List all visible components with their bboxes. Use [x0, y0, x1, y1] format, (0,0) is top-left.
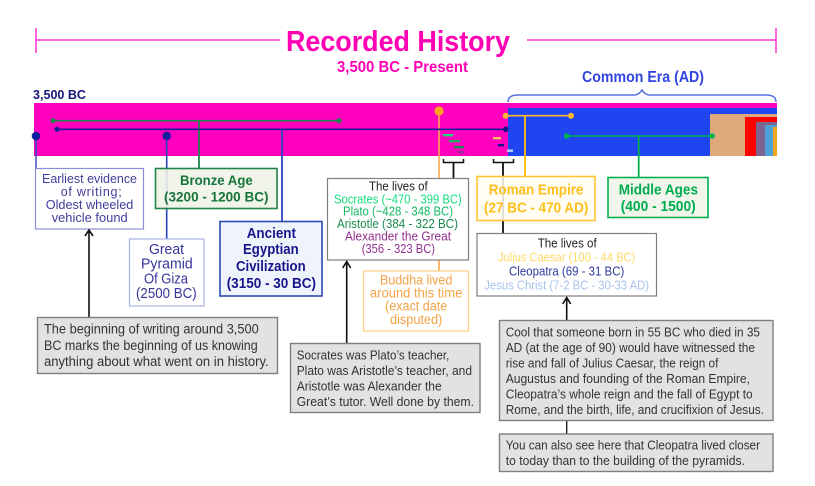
note: born in 55 BC: rise and fall of Julius Caesar, the reign of [506, 355, 719, 370]
connector between grey notes [566, 421, 568, 434]
bronze age span [50, 118, 342, 123]
box: roman empire [477, 176, 595, 220]
note: cleopatra closer to today: to today than to the building of the pyramids. [506, 453, 745, 468]
box: roman empire: (27 BC - 470 AD) [484, 200, 588, 217]
timeline bar [34, 103, 777, 156]
box: earliest writing [36, 168, 144, 229]
box: middle ages [608, 178, 708, 218]
note: teachers [290, 344, 480, 412]
box: ancient egyptian civilization [220, 222, 322, 296]
caesar cleopatra jesus lifespans [493, 137, 513, 152]
box: middle ages: Middle Ages [619, 183, 698, 199]
box: lives of socrates plato aristotle alexander [328, 178, 468, 260]
box: lives of socrates plato aristotle alexander: The lives of [369, 180, 428, 194]
box: ancient egyptian civilization: Egyptian [243, 242, 299, 258]
box: great pyramid: Great [149, 242, 184, 258]
note: born in 55 BC [500, 320, 773, 420]
box: lives of caesar cleopatra jesus [477, 234, 656, 296]
box: buddha: disputed) [390, 312, 442, 327]
arrow: teachers note to lives box [343, 262, 351, 343]
box: bronze age [156, 168, 277, 208]
box: lives of socrates plato aristotle alexander: Aristotle (384 - 322 BC) [337, 217, 458, 231]
common era label: Common Era (AD) [582, 69, 704, 86]
box: buddha: (exact date [385, 298, 447, 313]
box: earliest writing: Oldest wheeled [46, 197, 133, 212]
box: lives of caesar cleopatra jesus: Jesus Christ (7-2 BC - 30-33 AD) [484, 278, 649, 292]
box: lives of caesar cleopatra jesus: The lives of [538, 236, 597, 250]
box: earliest writing: of writing; [61, 185, 122, 199]
box: buddha [364, 271, 468, 331]
note: beginning of writing: anything about what went on in history. [44, 354, 269, 369]
note: teachers: Aristotle was Alexander the [297, 378, 442, 393]
note: born in 55 BC: Augustus and founding of the Roman Empire, [506, 371, 750, 386]
box: great pyramid: (2500 BC) [136, 286, 197, 302]
box: bronze age: (3200 - 1200 BC) [164, 188, 268, 204]
start label: 3,500 BC [33, 88, 86, 102]
egyptian civilization span [54, 126, 509, 132]
marker: earliest writing [32, 132, 40, 140]
title range bracket [36, 28, 776, 53]
philosopher lifespans [443, 134, 464, 153]
note: beginning of writing [38, 318, 278, 374]
box: buddha: Buddha lived [380, 272, 452, 287]
box: ancient egyptian civilization: Civilization [236, 259, 306, 275]
connector lines [36, 111, 639, 271]
box: great pyramid: Of Giza [144, 272, 189, 288]
box: lives of socrates plato aristotle alexander: Alexander the Great [345, 230, 451, 244]
box: lives of socrates plato aristotle alexander: Plato (~428 - 348 BC) [343, 205, 453, 219]
middle ages span [564, 133, 715, 139]
box: ancient egyptian civilization: Ancient [247, 226, 296, 242]
note: born in 55 BC: Rome, and the birth, life, and crucifixion of Jesus. [506, 402, 764, 417]
box: lives of caesar cleopatra jesus: Cleopatra (69 - 31 BC) [509, 264, 624, 278]
roman empire span [503, 113, 574, 119]
note: cleopatra closer to today [500, 434, 773, 472]
note: beginning of writing: BC marks the beginning of us knowing [44, 338, 258, 353]
arrow: writing note to earliest evidence [85, 230, 93, 317]
box: earliest writing: Earliest evidence [42, 171, 137, 186]
box: lives of socrates plato aristotle alexander: (356 - 323 BC) [362, 242, 435, 256]
box: lives of socrates plato aristotle alexander: Socrates (~470 - 399 BC) [334, 192, 462, 206]
note: beginning of writing: The beginning of writing around 3,500 [44, 321, 259, 336]
note: cleopatra closer to today: You can also see here that Cleopatra lived closer [506, 438, 761, 453]
box: great pyramid [130, 239, 204, 306]
box: buddha: around this time [370, 286, 462, 301]
marker: buddha [434, 106, 444, 116]
box: earliest writing: vehicle found [52, 210, 128, 225]
title: Recorded History [286, 26, 510, 58]
note: teachers: Socrates was Plato’s teacher, [297, 347, 449, 362]
box: roman empire: Roman Empire [489, 182, 583, 199]
note: teachers: Plato was Aristotle’s teacher, and [297, 363, 472, 378]
note: born in 55 BC: Cool that someone born in 55 BC who died in 35 [506, 325, 760, 340]
arrow: cool note to lives box [563, 298, 571, 320]
box: ancient egyptian civilization: (3150 - 30 BC) [227, 276, 316, 292]
subtitle: 3,500 BC - Present [337, 59, 468, 76]
marker: great pyramid [162, 132, 171, 140]
box: middle ages: (400 - 1500) [621, 199, 696, 215]
box: lives of caesar cleopatra jesus: Julius Caesar (100 - 44 BC) [498, 251, 635, 265]
common era brace [508, 90, 776, 102]
note: born in 55 BC: Cleopatra’s whole reign and the fall of Egypt to [506, 386, 753, 401]
box: bronze age: Bronze Age [180, 172, 253, 188]
note: born in 55 BC: AD (at the age of 90) would have witnessed the [506, 340, 755, 355]
box: great pyramid: Pyramid [141, 257, 193, 273]
note: teachers: Great’s tutor. Well done by them. [297, 394, 474, 409]
